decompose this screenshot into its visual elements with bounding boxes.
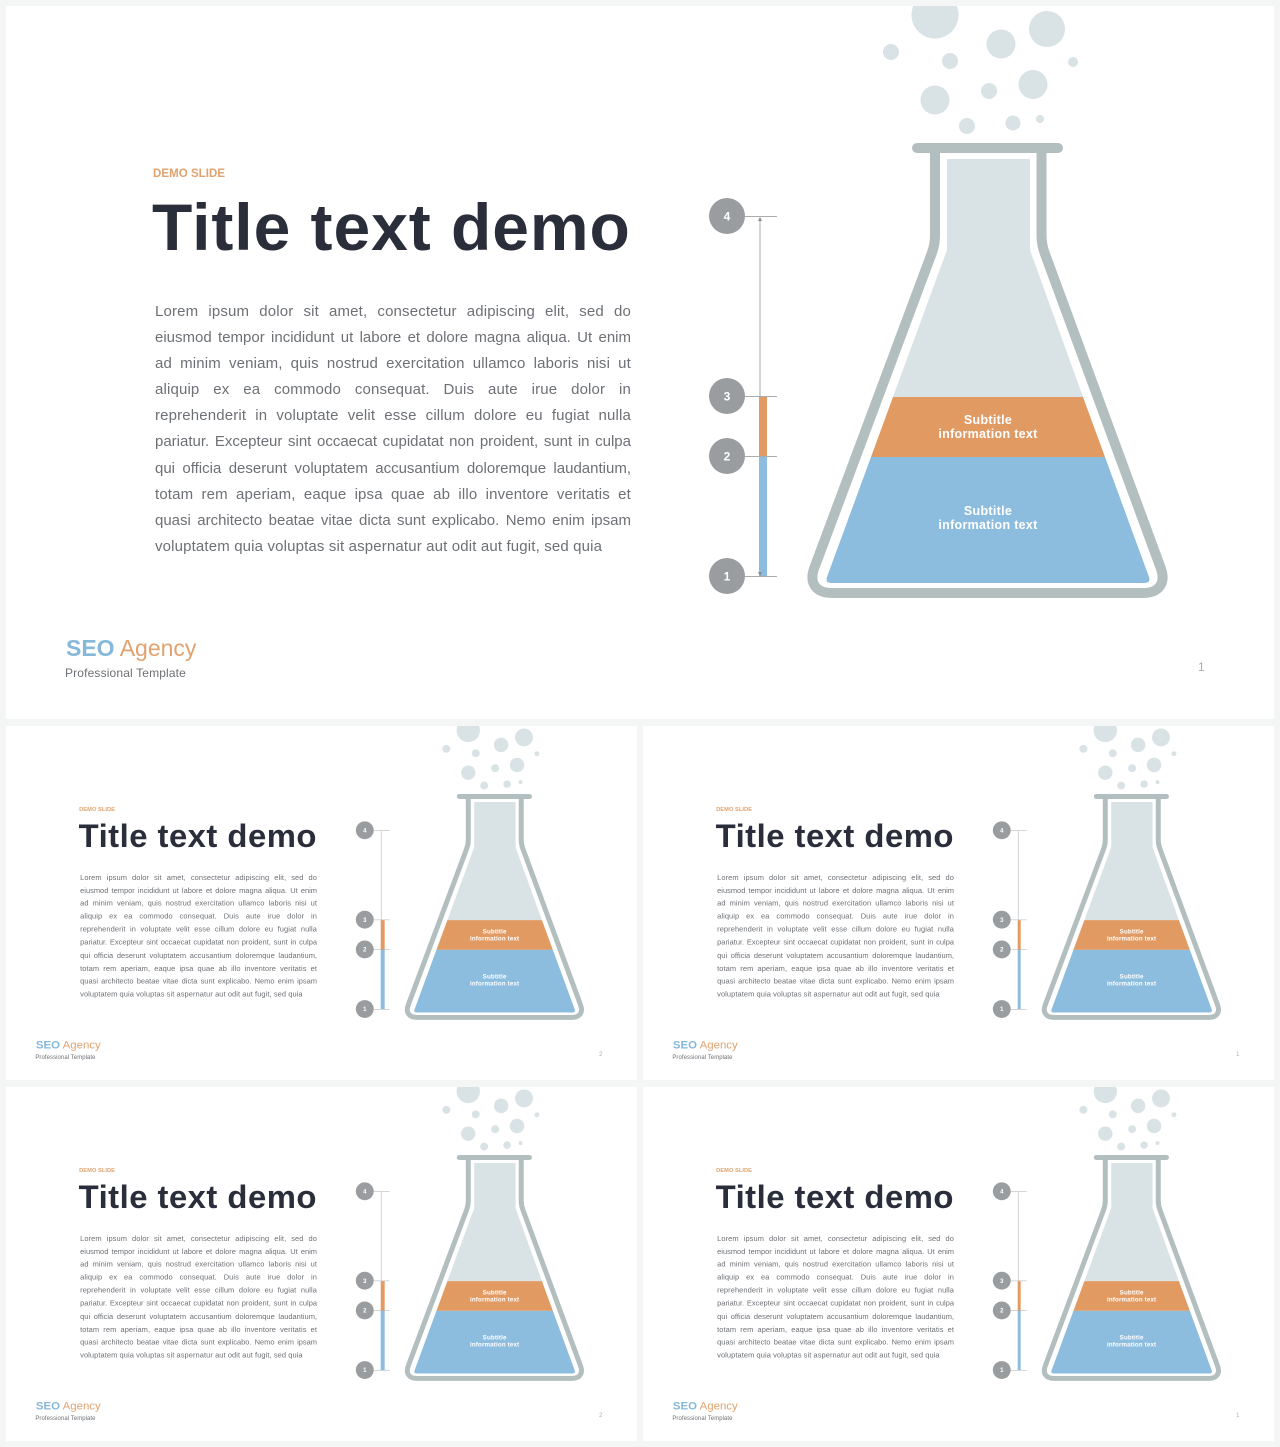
bubbles (1079, 1080, 1176, 1151)
flask label: orange: information text (938, 427, 1038, 441)
panel: thumbnail slide top left (6, 726, 637, 1080)
flask chart with scale (992, 1087, 1221, 1381)
text block: body copy: totam rem aperiam, eaque ipsa quae ab illo inventore veritatis et (717, 1325, 954, 1334)
flask chart with scale (356, 1087, 584, 1381)
scale marker 3: 3 (363, 1279, 367, 1285)
flask liquid: blue layer (1051, 1311, 1212, 1373)
text block: body copy: eiusmod tempor incididunt ut labore et dolore magna aliqua. Ut enim (717, 1247, 954, 1256)
flask chart with scale (356, 726, 584, 1020)
flask liquid: grey top layer (893, 159, 1083, 397)
flask label: orange: information text (470, 935, 519, 942)
text block: body copy (717, 1234, 954, 1360)
bubbles (442, 1080, 539, 1151)
scale marker 4: 4 (363, 1190, 367, 1195)
page number: 1 (1236, 1412, 1239, 1419)
flask liquid: blue layer (826, 457, 1149, 583)
text block: body copy: voluptatem quia voluptas sit aspernatur aut odit aut fugit, sed quia (80, 1351, 303, 1360)
scale marker 1 (993, 1361, 1011, 1379)
tagline: Professional Template (35, 1415, 96, 1422)
flask label: blue: Subtitle (483, 1335, 507, 1342)
text block: body copy: ad minim veniam, quis nostrud exercitation ullamco laboris nisi ut (80, 899, 317, 908)
scale marker 2: 2 (724, 450, 731, 464)
text block: body copy: eiusmod tempor incididunt ut labore et dolore magna aliqua. Ut enim (155, 329, 631, 346)
page number: 1 (1236, 1051, 1239, 1058)
flask label: blue: Subtitle (1120, 1335, 1144, 1342)
scale marker 4 (356, 821, 374, 839)
text block: body copy: eiusmod tempor incididunt ut labore et dolore magna aliqua. Ut enim (717, 886, 954, 895)
flask liquid: orange layer (1073, 1281, 1190, 1311)
scale bar (374, 831, 390, 1009)
text block: body copy: ad minim veniam, quis nostrud exercitation ullamco laboris nisi ut (80, 1260, 317, 1269)
flask label: blue: information text (470, 1342, 519, 1349)
scale marker 2: 2 (1000, 1309, 1004, 1315)
flask chart with scale (709, 6, 1168, 598)
text block: body copy: eiusmod tempor incididunt ut labore et dolore magna aliqua. Ut enim (80, 1247, 317, 1256)
text block: body copy: reprehenderit in voluptate velit esse cillum dolore eu fugiat nulla (155, 407, 631, 424)
text block: body copy (155, 303, 631, 555)
page number: 2 (599, 1412, 602, 1419)
logo: SEO Agency (673, 1399, 738, 1412)
panel: thumbnail slide top right (643, 726, 1274, 1080)
flask label: orange: information text (1107, 1296, 1156, 1303)
text block: body copy: voluptatem quia voluptas sit aspernatur aut odit aut fugit, sed quia (155, 538, 602, 555)
flask label: blue: information text (938, 518, 1038, 532)
scale marker 2 (993, 1301, 1011, 1319)
tagline: Professional Template (672, 1415, 733, 1422)
scale marker 4 (993, 821, 1011, 839)
logo: SEO Agency (673, 1038, 738, 1051)
flask outline (1044, 1158, 1218, 1378)
flask label: blue: information text (1107, 981, 1156, 988)
text block: body copy: aliquip ex ea commodo consequat. Duis aute irue dolor in (80, 1273, 317, 1282)
scale marker 3 (356, 1272, 374, 1290)
flask liquid: orange layer (871, 397, 1105, 457)
logo: SEO Agency (36, 1038, 101, 1051)
scale marker 4: 4 (1000, 1190, 1004, 1195)
scale marker 2 (709, 438, 745, 474)
text block: body copy: pariatur. Excepteur sint occaecat cupidatat non proident, sunt in culpa (717, 938, 954, 947)
text block: body copy: qui officia deserunt voluptatem accusantium doloremque laudantium, (717, 951, 954, 960)
scale marker 3 (993, 1272, 1011, 1290)
text block: body copy: reprehenderit in voluptate velit esse cillum dolore eu fugiat nulla (80, 1286, 317, 1295)
bubbles (883, 0, 1078, 134)
flask liquid: blue layer (414, 950, 575, 1012)
text block: body copy (80, 1234, 317, 1360)
flask liquid: grey top layer (1084, 1163, 1179, 1281)
scale marker 1 (993, 1000, 1011, 1018)
flask liquid: orange layer (436, 920, 553, 950)
text block: body copy: qui officia deserunt voluptatem accusantium doloremque laudantium, (80, 1312, 317, 1321)
scale marker 4: 4 (1000, 829, 1004, 834)
text block: body copy: qui officia deserunt voluptatem accusantium doloremque laudantium, (80, 951, 317, 960)
scale marker 3: 3 (1000, 918, 1004, 924)
flask liquid: blue layer (414, 1311, 575, 1373)
text block: body copy: totam rem aperiam, eaque ipsa quae ab illo inventore veritatis et (80, 1325, 317, 1334)
text block: body copy: Lorem ipsum dolor sit amet, consectetur adipiscing elit, sed do (155, 303, 631, 320)
scale marker 1: 1 (363, 1007, 367, 1013)
text block: body copy: pariatur. Excepteur sint occaecat cupidatat non proident, sunt in culpa (80, 938, 317, 947)
scale marker 4: 4 (363, 829, 367, 834)
text block: body copy (717, 873, 954, 999)
flask liquid: grey top layer (1084, 802, 1179, 920)
eyebrow label: DEMO SLIDE (79, 1167, 115, 1173)
text block: body copy: quasi architecto beatae vitae dicta sunt explicabo. Nemo enim ipsam (155, 512, 631, 529)
flask outline (407, 1158, 581, 1378)
title: Title text demo (79, 1178, 317, 1215)
scale marker 3: 3 (724, 390, 731, 404)
flask label: blue: Subtitle (483, 974, 507, 981)
scale marker 3: 3 (363, 918, 367, 924)
text block: body copy: quasi architecto beatae vitae dicta sunt explicabo. Nemo enim ipsam (80, 1338, 317, 1347)
flask label: orange: information text (1107, 935, 1156, 942)
text block: body copy: voluptatem quia voluptas sit aspernatur aut odit aut fugit, sed quia (80, 990, 303, 999)
scale marker 2 (356, 1301, 374, 1319)
flask outline (812, 148, 1163, 593)
scale marker 2 (356, 940, 374, 958)
text block: body copy: ad minim veniam, quis nostrud exercitation ullamco laboris nisi ut (717, 899, 954, 908)
flask liquid: orange layer (436, 1281, 553, 1311)
scale marker 3 (356, 911, 374, 929)
scale marker 1 (356, 1361, 374, 1379)
eyebrow label: DEMO SLIDE (79, 806, 115, 812)
title: Title text demo (716, 817, 954, 854)
text block: body copy: Lorem ipsum dolor sit amet, consectetur adipiscing elit, sed do (80, 1234, 317, 1243)
scale marker 3 (993, 911, 1011, 929)
flask label: orange: Subtitle (483, 1290, 507, 1297)
text block: body copy: ad minim veniam, quis nostrud exercitation ullamco laboris nisi ut (717, 1260, 954, 1269)
scale marker 2 (993, 940, 1011, 958)
flask label: blue: Subtitle (1120, 974, 1144, 981)
scale marker 3: 3 (1000, 1279, 1004, 1285)
text block: body copy: aliquip ex ea commodo consequat. Duis aute irue dolor in (155, 381, 631, 398)
tagline: Professional Template (35, 1054, 96, 1061)
text block: body copy: Lorem ipsum dolor sit amet, consectetur adipiscing elit, sed do (717, 1234, 954, 1243)
scale marker 1: 1 (1000, 1007, 1004, 1013)
text block: body copy: totam rem aperiam, eaque ipsa quae ab illo inventore veritatis et (80, 964, 317, 973)
scale bar (745, 216, 777, 576)
scale marker 1 (356, 1000, 374, 1018)
scale bar (1011, 831, 1027, 1009)
text block: body copy (80, 873, 317, 999)
text block: body copy: ad minim veniam, quis nostrud exercitation ullamco laboris nisi ut (155, 355, 631, 372)
eyebrow label: DEMO SLIDE (153, 168, 225, 180)
logo: SEO Agency (66, 635, 196, 661)
text block: body copy: pariatur. Excepteur sint occaecat cupidatat non proident, sunt in culpa (717, 1299, 954, 1308)
text block: body copy: totam rem aperiam, eaque ipsa quae ab illo inventore veritatis et (155, 486, 631, 503)
text block: body copy: quasi architecto beatae vitae dicta sunt explicabo. Nemo enim ipsam (80, 977, 317, 986)
scale marker 4 (993, 1182, 1011, 1200)
tagline: Professional Template (65, 666, 186, 680)
flask label: orange: Subtitle (964, 413, 1012, 427)
logo: SEO Agency (36, 1399, 101, 1412)
text block: body copy: quasi architecto beatae vitae dicta sunt explicabo. Nemo enim ipsam (717, 1338, 954, 1347)
scale marker 1: 1 (363, 1368, 367, 1374)
page number: 1 (1198, 660, 1205, 674)
eyebrow label: DEMO SLIDE (716, 1167, 752, 1173)
text block: body copy: voluptatem quia voluptas sit aspernatur aut odit aut fugit, sed quia (717, 1351, 940, 1360)
scale marker 3 (709, 378, 745, 414)
panel: main slide (6, 6, 1274, 719)
text block: body copy: totam rem aperiam, eaque ipsa quae ab illo inventore veritatis et (717, 964, 954, 973)
panel: thumbnail slide bottom right (643, 1087, 1274, 1441)
text block: body copy: pariatur. Excepteur sint occaecat cupidatat non proident, sunt in culpa (155, 433, 631, 450)
text block: body copy: qui officia deserunt voluptatem accusantium doloremque laudantium, (155, 460, 631, 477)
flask outline (1044, 797, 1218, 1017)
scale marker 4 (356, 1182, 374, 1200)
flask label: orange: Subtitle (1120, 929, 1144, 936)
page number: 2 (599, 1051, 602, 1058)
title: Title text demo (79, 817, 317, 854)
flask liquid: orange layer (1073, 920, 1190, 950)
text block: body copy: reprehenderit in voluptate velit esse cillum dolore eu fugiat nulla (717, 1286, 954, 1295)
title: Title text demo (716, 1178, 954, 1215)
text block: body copy: Lorem ipsum dolor sit amet, consectetur adipiscing elit, sed do (80, 873, 317, 882)
text block: body copy: aliquip ex ea commodo consequat. Duis aute irue dolor in (717, 912, 954, 921)
tagline: Professional Template (672, 1054, 733, 1061)
flask chart with scale (992, 726, 1221, 1020)
scale marker 1 (709, 558, 745, 594)
flask liquid: grey top layer (447, 802, 542, 920)
scale bar (374, 1192, 390, 1370)
scale marker 2: 2 (1000, 948, 1004, 954)
flask label: blue: Subtitle (964, 504, 1012, 518)
text block: body copy: pariatur. Excepteur sint occaecat cupidatat non proident, sunt in culpa (80, 1299, 317, 1308)
flask liquid: blue layer (1051, 950, 1212, 1012)
flask outline (407, 797, 581, 1017)
text block: body copy: qui officia deserunt voluptatem accusantium doloremque laudantium, (717, 1312, 954, 1321)
scale bar (1011, 1192, 1027, 1370)
text block: body copy: aliquip ex ea commodo consequat. Duis aute irue dolor in (80, 912, 317, 921)
panel: thumbnail slide bottom left (6, 1087, 637, 1441)
bubbles (442, 719, 539, 790)
scale marker 2: 2 (363, 948, 367, 954)
flask label: blue: information text (1107, 1342, 1156, 1349)
flask label: orange: Subtitle (483, 929, 507, 936)
text block: body copy: aliquip ex ea commodo consequat. Duis aute irue dolor in (717, 1273, 954, 1282)
text block: body copy: reprehenderit in voluptate velit esse cillum dolore eu fugiat nulla (717, 925, 954, 934)
text block: body copy: quasi architecto beatae vitae dicta sunt explicabo. Nemo enim ipsam (717, 977, 954, 986)
scale marker 4 (709, 198, 745, 234)
text block: body copy: voluptatem quia voluptas sit aspernatur aut odit aut fugit, sed quia (717, 990, 940, 999)
scale marker 4: 4 (724, 210, 731, 224)
text block: body copy: eiusmod tempor incididunt ut labore et dolore magna aliqua. Ut enim (80, 886, 317, 895)
scale marker 1: 1 (1000, 1368, 1004, 1374)
flask liquid: grey top layer (447, 1163, 542, 1281)
scale marker 2: 2 (363, 1309, 367, 1315)
flask label: blue: information text (470, 981, 519, 988)
text block: body copy: Lorem ipsum dolor sit amet, consectetur adipiscing elit, sed do (717, 873, 954, 882)
eyebrow label: DEMO SLIDE (716, 806, 752, 812)
text block: body copy: reprehenderit in voluptate velit esse cillum dolore eu fugiat nulla (80, 925, 317, 934)
flask label: orange: Subtitle (1120, 1290, 1144, 1297)
bubbles (1079, 719, 1176, 790)
title: Title text demo (152, 190, 631, 264)
scale marker 1: 1 (724, 570, 731, 584)
flask label: orange: information text (470, 1296, 519, 1303)
